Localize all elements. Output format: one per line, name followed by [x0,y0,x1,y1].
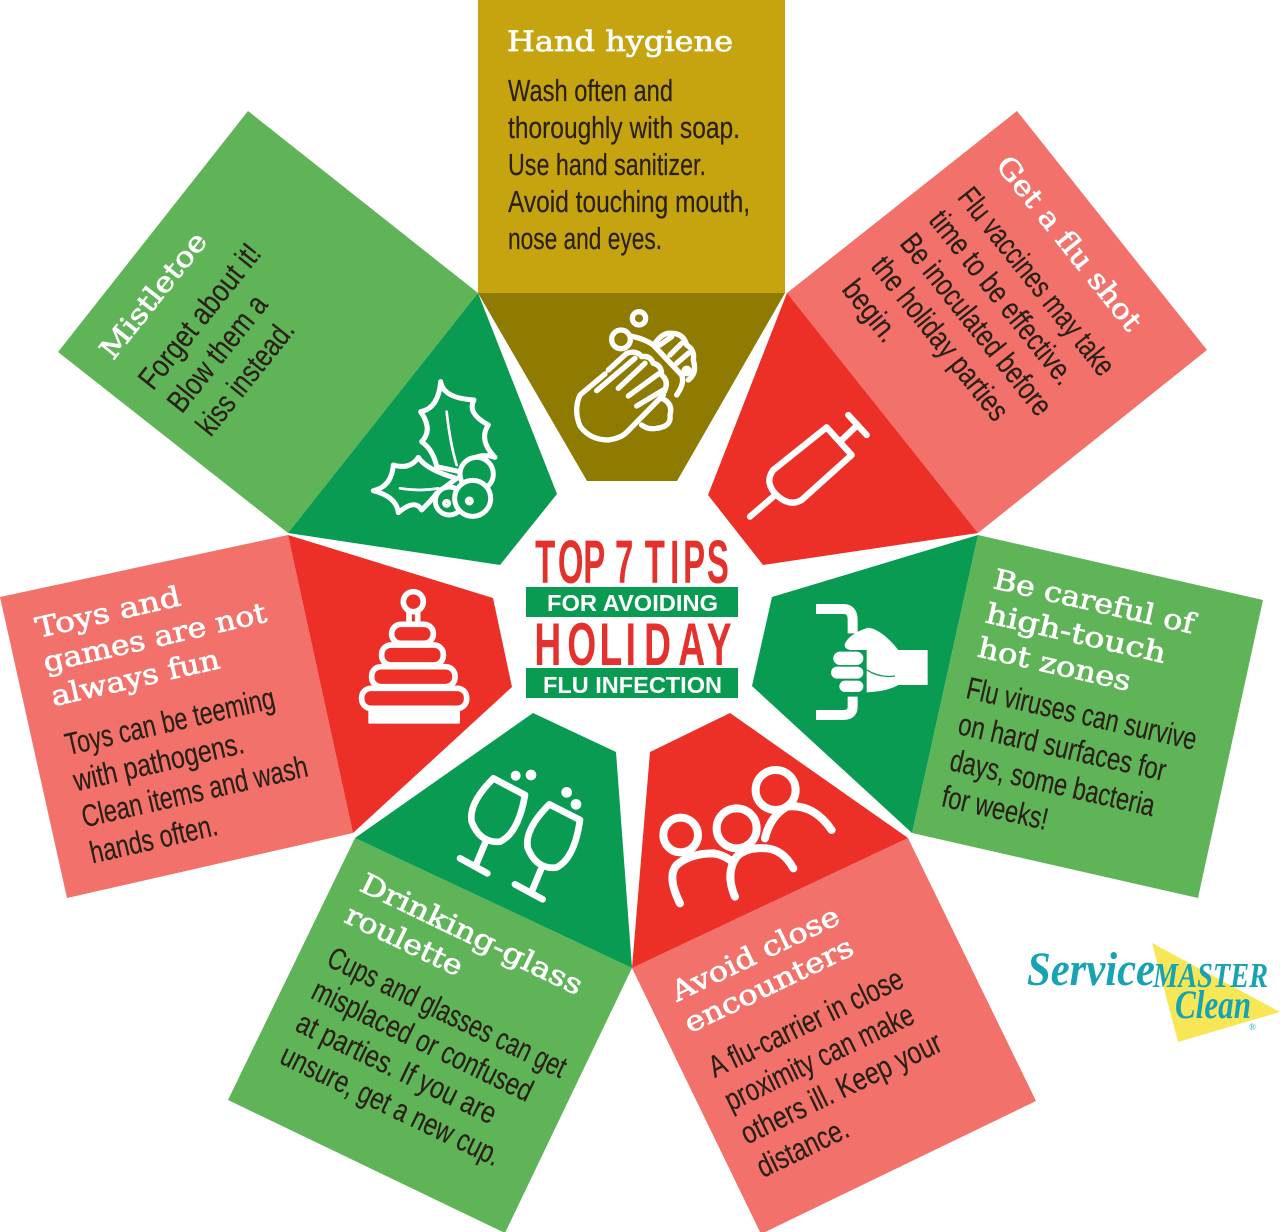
heading and body text: others ill. Keep your [735,1025,947,1151]
heading and body text: with pathogens. [69,725,247,798]
heading and body text: Flu viruses can survive [963,670,1200,757]
heading and body text: Be careful of [990,563,1201,641]
icon: group of people [663,770,832,903]
heading and body text: high-touch [983,597,1169,670]
heading and body text [664,883,963,1186]
heading and body text: proximity can make [719,997,919,1118]
heading and body text: A flu-carrier in close [703,961,909,1084]
panel background [58,111,478,533]
icon wedge [478,293,785,481]
band: for avoiding [526,587,738,617]
heading and body text: encounters [679,930,859,1040]
heading and body text: misplaced or confused [306,972,539,1108]
heading and body text [32,561,319,871]
panel: drinking-glass roulette [228,713,632,1232]
logo triangle [1152,943,1280,1042]
logo wordmark: clean: Clean [1175,982,1251,1027]
panel: avoid close encounters [632,713,1036,1232]
heading and body text: Mistletoe [93,225,214,365]
heading and body text: kiss instead. [189,313,302,442]
icon wedge [355,713,632,968]
heading and body text: distance. [751,1110,854,1184]
logo wordmark: Service [1027,943,1155,996]
body text: Use hand sanitizer. [508,147,706,182]
title line: holiday: HOLIDAY [534,611,732,678]
heading and body text [273,867,607,1182]
panel: get a flu shot [708,111,1207,565]
icon: holly leaves and berries [373,382,495,516]
heading and body text: time to be effective. [922,203,1082,392]
icon wedge [632,713,908,968]
heading and body text [835,149,1160,475]
logo: ServiceMaster Clean [1027,943,1280,1042]
icon: syringe [750,415,867,517]
heading and body text: begin. [835,272,906,349]
heading and body text: at parties. If you are [291,1005,502,1131]
heading and body text: Blow them a [160,287,275,419]
body text [508,73,750,256]
heading and body text: on hard surfaces for [955,706,1170,788]
band: for avoiding: FOR AVOIDING [547,590,718,616]
heading and body text: Toys and [32,580,184,645]
panel: mistletoe [58,111,557,565]
body text: nose and eyes. [508,221,662,256]
panel: toys and games [0,535,512,898]
heading: hand hygiene: Hand hygiene [507,25,733,58]
heading and body text: for weeks! [939,779,1052,837]
icon: stacking ring toy [362,592,467,724]
panel background [787,111,1207,533]
icon wedge [708,293,978,565]
icon: two wine glasses [460,770,581,899]
panel background [478,0,785,293]
heading and body text: hot zones [975,631,1134,698]
heading and body text: hands often. [86,807,221,870]
title line: top 7 tips: TOP 7 TIPS [535,529,729,597]
heading and body text: Forget about it! [131,236,268,396]
panel background [912,535,1263,898]
heading and body text [939,562,1225,865]
heading and body text: Get a flu shot [990,149,1149,338]
heading and body text: games are not [40,596,270,679]
panel: high-touch hot zones [752,535,1263,898]
panel background [632,838,1036,1232]
heading and body text: Avoid close [665,899,845,1009]
heading and body text: unsure, get a new cup. [275,1037,507,1173]
panel background [0,535,353,898]
heading and body text: Drinking-glass [355,867,588,1002]
panel background [228,838,632,1232]
heading and body text: Flu vaccines may take [951,180,1122,383]
heading and body text [93,206,326,443]
heading and body text: always fun [48,643,223,713]
band: flu infection: FLU INFECTION [543,672,722,698]
registered mark: ® [1249,1022,1256,1032]
icon wedge [288,535,512,833]
icon wedge [752,535,978,833]
heading and body text: Clean items and wash [78,749,311,834]
body text: Wash often and [508,73,673,108]
icon wedge [288,293,557,565]
heading and body text: Cups and glasses can get [322,940,573,1085]
center title [526,529,738,698]
icon: hand gripping rail [816,609,928,715]
body text: Avoid touching mouth, [508,184,750,219]
body text: thoroughly with soap. [508,110,740,145]
heading and body text: roulette [340,898,469,983]
icon: washing hands [577,312,695,440]
heading and body text: Toys can be teeming [62,680,278,762]
heading and body text: Be inoculated before [893,226,1060,422]
heading and body text: days, some bacteria [947,743,1159,823]
heading and body text: the holiday parties [864,249,1016,428]
panel: hand hygiene [478,0,785,481]
